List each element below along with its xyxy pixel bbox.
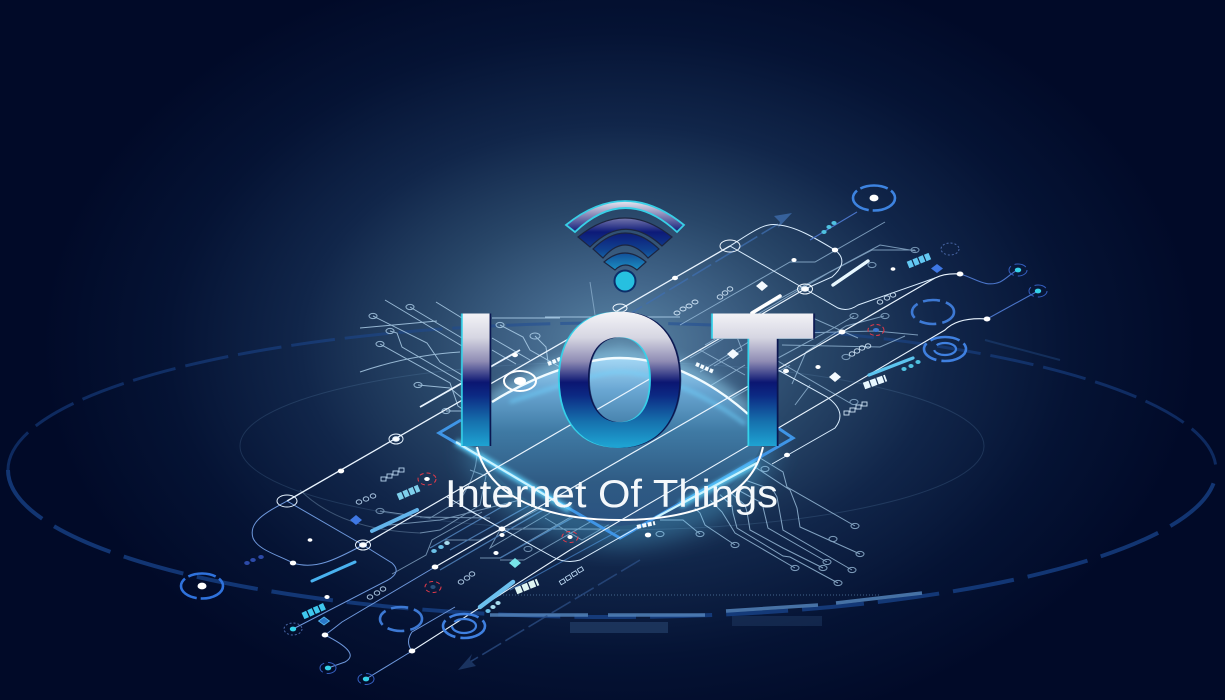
nodes and rings right: [512, 186, 1047, 457]
junction rings left: [277, 434, 403, 550]
circuit traces: lower right cluster: [656, 458, 864, 586]
shield panel: [478, 357, 764, 526]
blue loop traces left: [252, 501, 455, 679]
letter O: O: [555, 276, 684, 484]
circuit traces: lower left cluster: [300, 447, 620, 590]
small chevrons around shield: [548, 358, 714, 527]
subtitle: Internet Of Things: [445, 473, 778, 516]
white diamonds: [727, 281, 841, 382]
circuit traces: upper right cluster: [680, 222, 1060, 410]
blue wavy traces right: [810, 212, 1038, 319]
dashed ring left: [380, 607, 422, 631]
wifi icon: [566, 201, 684, 292]
top ring node: [853, 186, 895, 210]
dot rows left: [244, 541, 501, 613]
diamond frame: [439, 358, 793, 538]
wifi arc 2: [578, 218, 672, 247]
shield glow halo: [478, 357, 764, 530]
wifi arc 4: [604, 253, 646, 270]
cyan dot rows right: [821, 221, 921, 371]
chevrons right: [864, 256, 930, 386]
blue diamond: [931, 264, 943, 273]
orbit rings: [8, 323, 1216, 633]
main white circuit lines: [287, 224, 987, 651]
faded direction arrows: [458, 213, 792, 670]
small circle rows left: [356, 468, 584, 599]
bars right: [752, 261, 913, 375]
white dots left: [290, 469, 651, 654]
bars left: [312, 510, 513, 607]
dashed outline node: [941, 243, 959, 255]
nodes and rings left: [181, 358, 714, 684]
wifi arc 1: [566, 201, 684, 232]
teal node 2: [1029, 285, 1047, 297]
red ring right: [868, 324, 884, 336]
letter I: I: [454, 275, 498, 483]
wifi dot: [614, 270, 636, 292]
diamonds left: [318, 515, 521, 625]
chevrons left: [303, 488, 538, 616]
concentric ring right: [924, 337, 966, 361]
letter T: T: [713, 276, 813, 484]
wifi arc 3: [593, 233, 659, 258]
dashed ring right: [912, 300, 954, 324]
junction rings: [613, 240, 812, 312]
small circle rows right: [674, 287, 896, 415]
red rings left: [418, 473, 578, 592]
left ring node: [181, 574, 223, 598]
IOT letters: [454, 275, 813, 484]
circuit traces: left cluster: [360, 282, 680, 414]
white dots: [512, 248, 990, 457]
concentric ring left: [443, 614, 485, 638]
teal node 1: [1009, 264, 1027, 276]
central bright ring: [504, 371, 536, 391]
teal nodes left: [284, 623, 374, 684]
